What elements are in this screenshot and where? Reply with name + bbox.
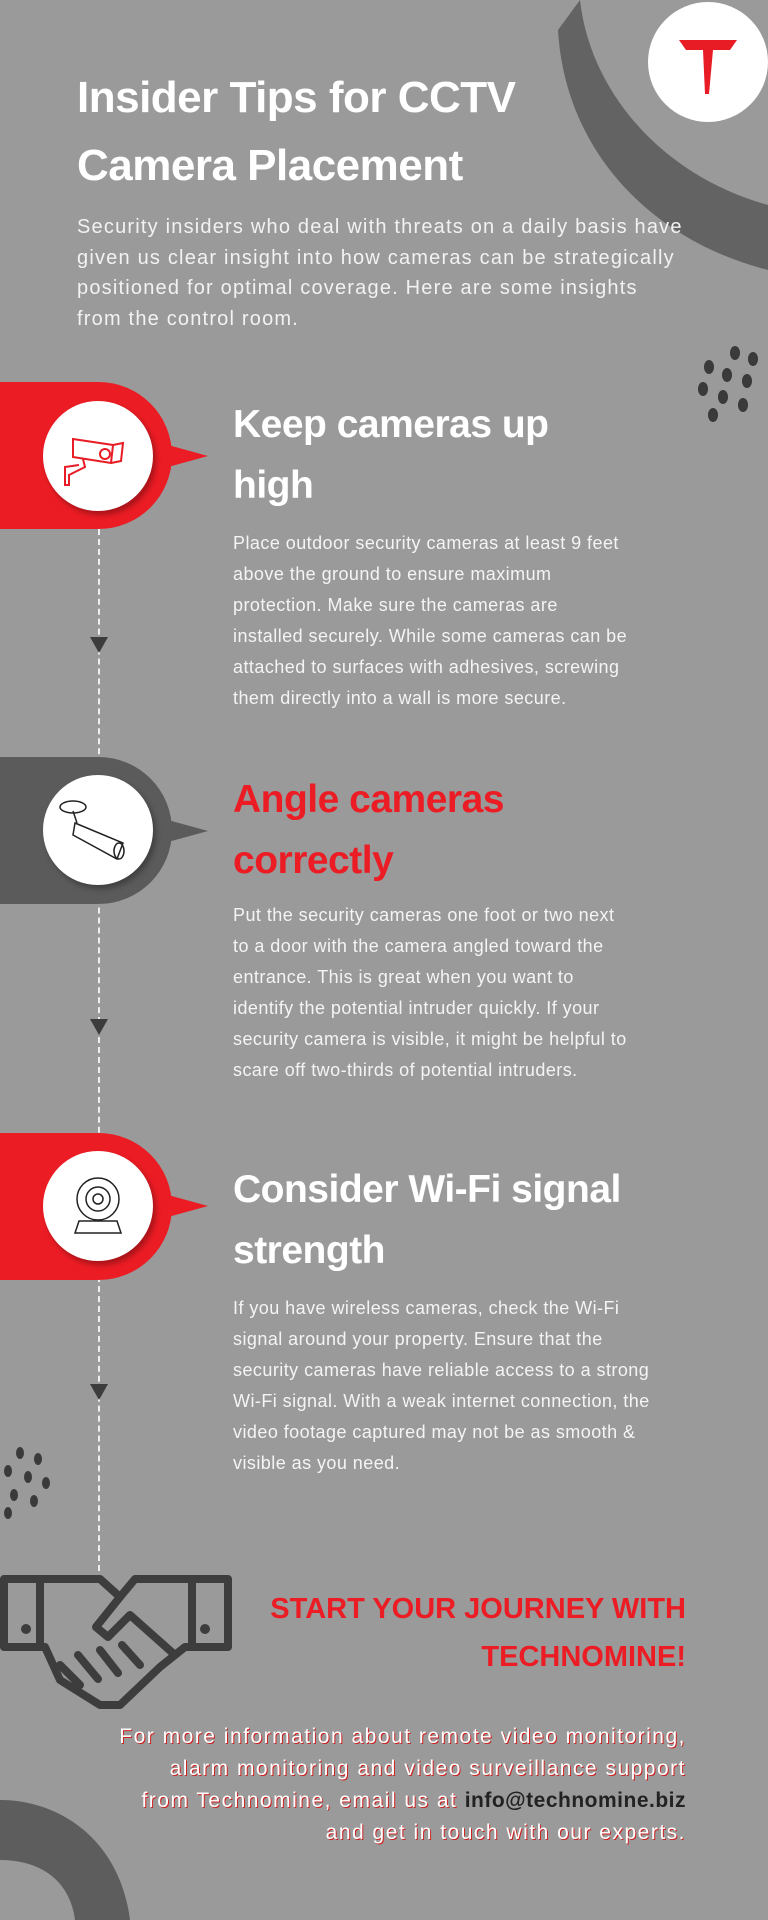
body text: installed securely. While some cameras can be [233, 626, 627, 646]
body text: identify the potential intruder quickly. If your [233, 998, 599, 1018]
tab red [0, 1133, 172, 1280]
heading: correctly [233, 839, 393, 882]
body text: visible as you need. [233, 1453, 400, 1473]
arrow 1 [90, 637, 108, 653]
body text: scare off two-thirds of potential intruders. [233, 1060, 578, 1080]
heading: strength [233, 1229, 385, 1272]
decorative dots top right [698, 346, 758, 422]
title: Insider Tips for CCTV [77, 73, 516, 122]
body text: video footage captured may not be as smooth & [233, 1422, 636, 1442]
body text: entrance. This is great when you want to [233, 967, 574, 987]
footer text: For more information about remote video monitoring, [119, 1725, 686, 1748]
section 1 panel [0, 382, 627, 708]
body text: signal around your property. Ensure that the [233, 1329, 603, 1349]
tab gray [0, 757, 172, 904]
timeline dashed line [98, 529, 100, 1581]
intro text: Security insiders who deal with threats on a daily basis have [77, 216, 683, 238]
CTA heading [270, 1593, 686, 1673]
intro text: positioned for optimal coverage. Here are some insights [77, 277, 638, 299]
heading: Keep cameras up [233, 403, 548, 446]
body text: Wi-Fi signal. With a weak internet connection, the [233, 1391, 650, 1411]
body text: Place outdoor security cameras at least 9 feet [233, 533, 619, 553]
footer text: from Technomine, email us at info@technomine.biz [141, 1789, 686, 1812]
body text: security camera is visible, it might be helpful to [233, 1029, 627, 1049]
icon: cctv camera [43, 401, 153, 511]
decorative brush stroke top right [558, 0, 768, 270]
body text: above the ground to ensure maximum [233, 564, 551, 584]
heading [233, 778, 504, 882]
section 3 panel [0, 1133, 650, 1473]
icon: handshake [0, 1575, 232, 1709]
brush stroke bottom left [0, 1800, 130, 1920]
decorative dots left [4, 1447, 50, 1519]
title: Camera Placement [77, 141, 463, 190]
body text: If you have wireless cameras, check the Wi-Fi [233, 1298, 619, 1318]
heading: Consider Wi-Fi signal [233, 1168, 621, 1211]
CTA heading: TECHNOMINE! [481, 1641, 686, 1673]
icon: bullet camera [43, 775, 153, 885]
intro text: from the control room. [77, 308, 299, 330]
tab red [0, 382, 172, 529]
arrow 3 [90, 1384, 108, 1400]
arrow 2 [90, 1019, 108, 1035]
footer text: alarm monitoring and video surveillance support [170, 1757, 686, 1780]
title [77, 73, 516, 190]
CTA heading: START YOUR JOURNEY WITH [270, 1593, 686, 1625]
body text: Put the security cameras one foot or two next [233, 905, 614, 925]
footer text: and get in touch with our experts. [326, 1821, 686, 1844]
logo [648, 2, 768, 122]
heading [233, 403, 548, 507]
body text [233, 1298, 650, 1473]
section 2 panel [0, 757, 627, 1080]
body text: to a door with the camera angled toward the [233, 936, 604, 956]
body text: security cameras have reliable access to a strong [233, 1360, 649, 1380]
body text: attached to surfaces with adhesives, screwing [233, 657, 619, 677]
icon: dome camera [43, 1151, 153, 1261]
body text [233, 533, 627, 708]
intro text [77, 216, 683, 330]
body text [233, 905, 627, 1080]
body text: them directly into a wall is more secure. [233, 688, 567, 708]
footer text [119, 1725, 686, 1844]
heading [233, 1168, 621, 1272]
heading: Angle cameras [233, 778, 504, 821]
heading: high [233, 464, 313, 507]
intro text: given us clear insight into how cameras can be strategically [77, 246, 675, 268]
body text: protection. Make sure the cameras are [233, 595, 558, 615]
